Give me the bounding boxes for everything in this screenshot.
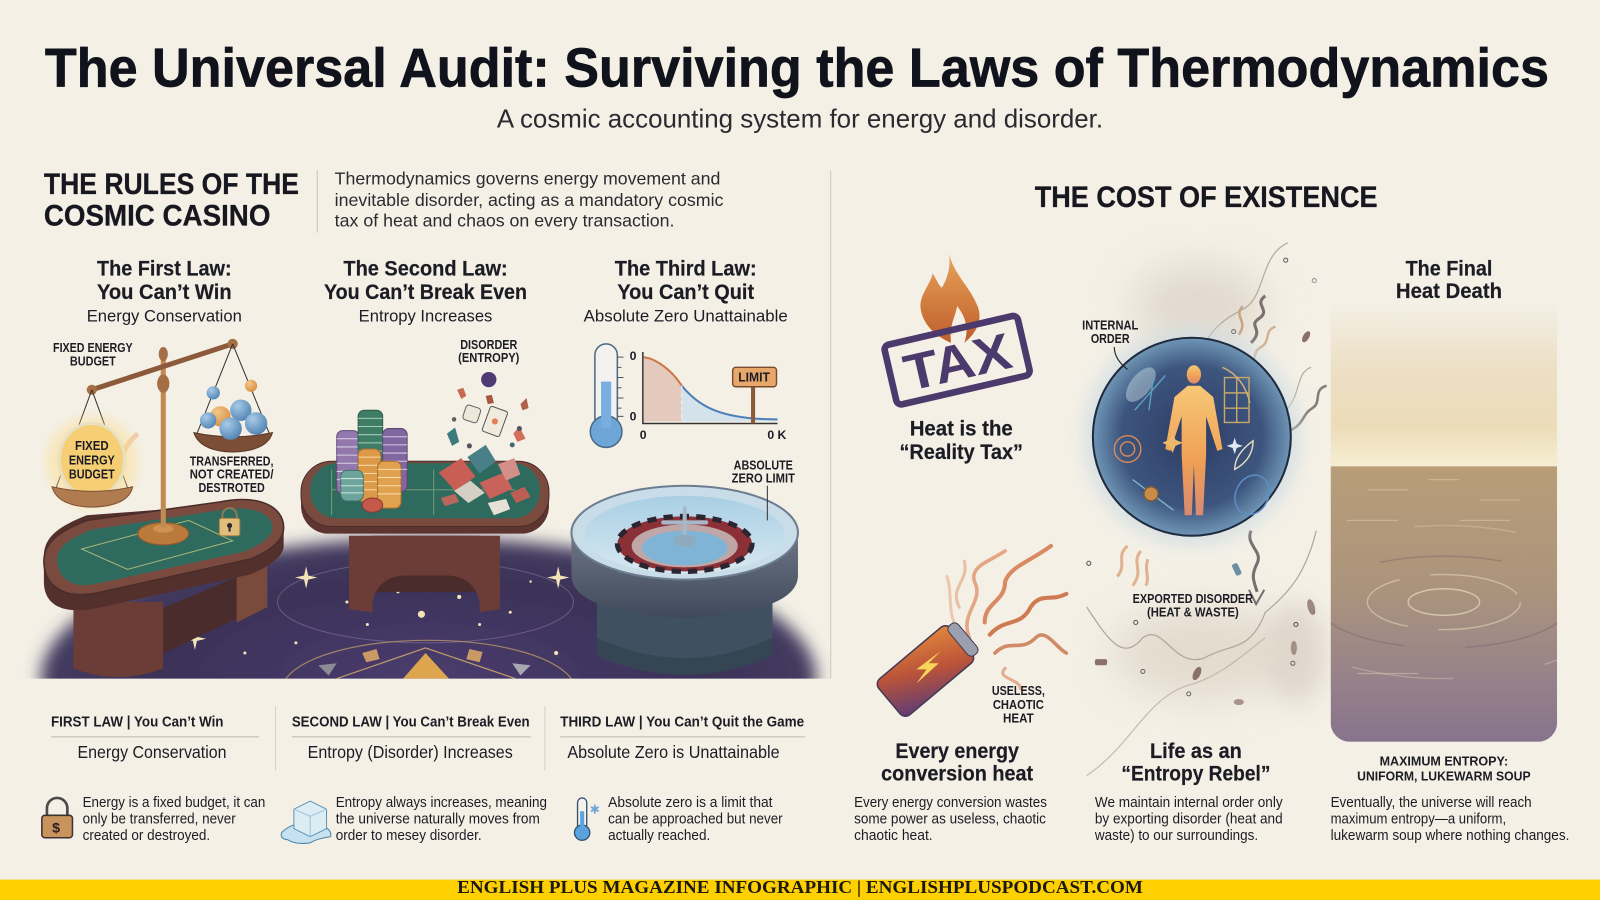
label: absolute zero limit: ABSOLUTE (734, 457, 793, 472)
summary: third law: THIRD LAW | You Can’t Quit the Game (560, 715, 804, 731)
label: internal order: INTERNAL (1082, 318, 1138, 333)
first law description: created or destroyed. (83, 828, 210, 844)
label: disorder entropy: DISORDER (460, 337, 517, 352)
sea (1331, 466, 1557, 742)
table 1 with scale (39, 339, 284, 677)
heading: reality tax: Heat is the (910, 418, 1013, 441)
label: exported disorder: (HEAT & WASTE) (1147, 604, 1239, 619)
label: transferred not created: NOT CREATED/ (190, 467, 274, 482)
third law heading: The Third Law: (615, 258, 757, 281)
sky (1331, 302, 1557, 466)
heading: final heat death: The Final (1406, 258, 1492, 281)
heading: life as entropy rebel: Life as an (1150, 740, 1242, 763)
panel: heat death (1330, 260, 1557, 742)
limit sign (733, 367, 777, 423)
icon: small thermometer: ✱ (590, 802, 600, 816)
summary: third law: Absolute Zero is Unattainable (567, 742, 780, 762)
third law heading (584, 258, 788, 325)
label: internal order (1082, 318, 1138, 369)
heading: final heat death: Heat Death (1396, 280, 1502, 303)
summary: first law (51, 715, 259, 762)
third law description: Absolute zero is a limit that (608, 795, 772, 811)
TAX stamp: TAX (898, 322, 1017, 402)
text: energy waste: some power as useless, chaotic (854, 811, 1046, 827)
first law heading: The First Law: (97, 258, 232, 281)
cooling curve chart: 0 (630, 409, 637, 423)
third law heading: You Can’t Quit (617, 281, 754, 304)
text: internal order (1094, 795, 1283, 844)
summary: first law: Energy Conservation (78, 742, 227, 762)
label: absolute zero limit: ZERO LIMIT (732, 471, 795, 486)
heading: final heat death (1396, 258, 1502, 303)
label: fixed energy budget (53, 340, 133, 368)
icon: melting ice cube (281, 801, 331, 843)
second law heading: You Can’t Break Even (324, 281, 527, 304)
heading: every energy conversion: Every energy (895, 740, 1019, 763)
intro text (335, 169, 724, 231)
entropy dust and squiggles (1087, 243, 1327, 776)
waste heat squiggles (947, 546, 1066, 689)
icon: padlock with dollar: $ (52, 821, 60, 837)
heading: reality tax (899, 418, 1023, 464)
intro text: inevitable disorder, acting as a mandatory cosmic (335, 190, 724, 210)
icon: large thermometer (590, 344, 623, 447)
third law description: can be approached but never (608, 811, 783, 827)
second law description: the universe naturally moves from (336, 811, 540, 827)
cooling curve chart: 0 (630, 349, 637, 363)
second law description: Entropy always increases, meaning (336, 795, 547, 811)
text: heat death (1331, 795, 1569, 844)
text: energy waste (854, 795, 1047, 844)
subtitle: A cosmic accounting system for energy and disorder. (497, 106, 1103, 134)
cell and DNA icons (1114, 367, 1275, 520)
text: internal order: waste) to our surroundings. (1094, 828, 1258, 844)
second law heading: Entropy Increases (359, 306, 492, 325)
first law heading: Energy Conservation (87, 306, 242, 325)
casino scene illustration (39, 339, 816, 819)
label: exported disorder (1133, 591, 1253, 619)
heading: cost of existence: THE COST OF EXISTENCE (1035, 181, 1378, 214)
label: transferred not created: DESTROTED (198, 480, 265, 495)
text: energy waste: chaotic heat. (854, 828, 933, 844)
heading: life as entropy rebel: “Entropy Rebel” (1121, 763, 1270, 786)
text: energy waste: Every energy conversion wastes (854, 795, 1047, 811)
first law description (83, 795, 265, 844)
third law description (608, 795, 783, 844)
roulette wheel (571, 486, 798, 675)
label: disorder entropy: (ENTROPY) (458, 350, 519, 365)
label: useless chaotic heat (992, 683, 1045, 725)
third law heading: Absolute Zero Unattainable (584, 306, 788, 325)
glowing energy budget coin: BUDGET (69, 467, 115, 482)
label: exported disorder: EXPORTED DISORDER (1133, 591, 1253, 606)
label: useless chaotic heat: USELESS, (992, 683, 1045, 698)
icon: flame (920, 253, 980, 343)
scattered cards and dice (439, 372, 531, 515)
glowing energy budget coin (39, 409, 145, 515)
ripples (1330, 479, 1557, 680)
energy balls (200, 380, 267, 440)
summary: second law (292, 715, 531, 762)
summary: first law: FIRST LAW | You Can’t Win (51, 715, 223, 731)
limit sign: LIMIT (738, 370, 770, 385)
cooling curve chart (630, 349, 787, 442)
heading: rules of the cosmic casino: COSMIC CASINO (44, 200, 270, 233)
glowing energy budget coin: FIXED (75, 438, 109, 453)
third law description: actually reached. (608, 828, 710, 844)
heading: rules of the cosmic casino: THE RULES OF THE (44, 168, 299, 201)
cosmic floor (28, 530, 830, 679)
text: internal order: We maintain internal order only (1095, 795, 1283, 811)
first law heading: You Can’t Win (97, 281, 232, 304)
second law description (336, 795, 547, 844)
heading: reality tax: “Reality Tax” (899, 441, 1023, 464)
footer bar: ENGLISH PLUS MAGAZINE INFOGRAPHIC | ENGLISHPLUSPODCAST.COM (457, 877, 1143, 897)
second law heading: The Second Law: (343, 258, 508, 281)
poker chips (337, 410, 407, 512)
bubble: internal order (1083, 328, 1301, 546)
first law description: only be transferred, never (83, 811, 236, 827)
cooling curve chart: 0 K (767, 428, 787, 442)
label: maximum entropy (1357, 753, 1531, 784)
icon: small thermometer (574, 798, 600, 840)
battery with waste heat (874, 546, 1066, 719)
cooling curve chart: 0 (640, 428, 647, 442)
title: The Universal Audit: Surviving the Laws of Thermodynamics (45, 37, 1549, 99)
intro text: Thermodynamics governs energy movement and (335, 169, 720, 189)
second law description: order to mesey disorder. (336, 828, 482, 844)
footer bar (0, 877, 1600, 900)
text: internal order: by exporting disorder (heat and (1095, 811, 1283, 827)
label: useless chaotic heat: CHAOTIC (993, 697, 1044, 712)
label: maximum entropy: MAXIMUM ENTROPY: (1380, 753, 1508, 768)
label: fixed energy budget: FIXED ENERGY (53, 340, 133, 355)
label: fixed energy budget: BUDGET (70, 353, 116, 368)
summary: third law (560, 715, 805, 762)
text: heat death: Eventually, the universe will reach (1331, 795, 1532, 811)
summary: second law: Entropy (Disorder) Increases (308, 742, 513, 762)
first law description: Energy is a fixed budget, it can (83, 795, 265, 811)
first law heading (87, 258, 242, 325)
label: internal order: ORDER (1091, 331, 1130, 346)
heading: life as entropy rebel (1121, 740, 1270, 786)
label: transferred not created: TRANSFERRED, (190, 453, 273, 468)
TAX stamp (884, 315, 1031, 405)
heading: every energy conversion (881, 740, 1033, 786)
label: absolute zero limit (732, 457, 795, 486)
heading: every energy conversion: conversion heat (881, 763, 1033, 786)
icon: glowing human (1165, 365, 1222, 515)
tax stamp with flame (884, 253, 1031, 405)
label: useless chaotic heat: HEAT (1003, 710, 1034, 725)
text: heat death: maximum entropy—a uniform, (1331, 811, 1506, 827)
second law heading (324, 258, 527, 325)
intro text: tax of heat and chaos on every transaction. (335, 211, 674, 231)
label: disorder entropy (458, 337, 519, 365)
label: transferred not created (190, 453, 274, 495)
heading: rules of the cosmic casino (44, 168, 299, 233)
icon: battery (874, 618, 983, 719)
text: heat death: lukewarm soup where nothing changes. (1331, 828, 1569, 844)
table 2 with chips and cards (301, 372, 549, 612)
summary: second law: SECOND LAW | You Can’t Break Even (292, 715, 530, 731)
glowing energy budget coin: ENERGY (69, 452, 115, 467)
icon: padlock on table (219, 508, 240, 536)
balance scale (39, 339, 272, 545)
icon: padlock with dollar (42, 798, 72, 838)
label: maximum entropy: UNIFORM, LUKEWARM SOUP (1357, 769, 1531, 784)
